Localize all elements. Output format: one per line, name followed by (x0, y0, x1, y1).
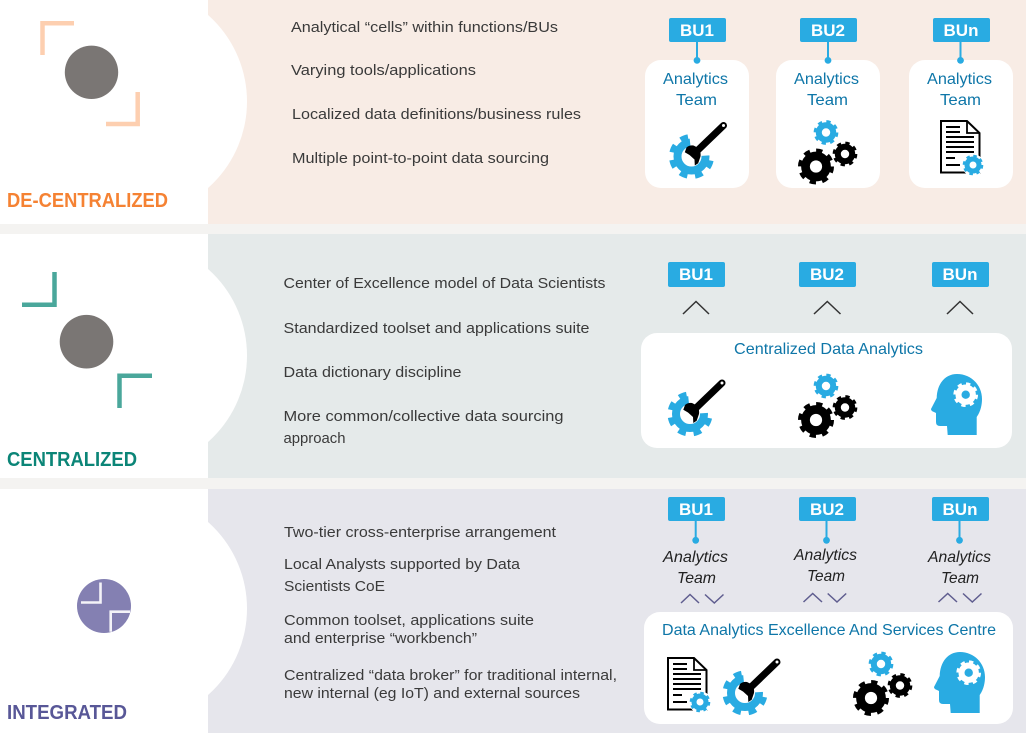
card: BUn analytics team: BUn (944, 21, 978, 40)
card: BU1 analytics team: Analytics (663, 71, 728, 88)
card: BUn analytics team: Team (940, 92, 981, 109)
card: data analytics excellence and services centre (644, 612, 1013, 724)
card: BUn analytics team (909, 18, 1013, 188)
card: BU2 analytics team: Team (807, 92, 848, 109)
column: BU2 analytics team: BU2 (810, 500, 844, 519)
text block: integrated traits: Scientists CoE (284, 578, 385, 595)
text block: integrated traits: Centralized “data broker” for traditional internal, (284, 667, 617, 684)
text block: de-centralized traits (291, 19, 581, 167)
column: BU1 analytics team: Team (677, 570, 716, 587)
card: BU2 analytics team (776, 18, 880, 188)
text block: de-centralized traits: Multiple point-to-point data sourcing (292, 150, 549, 167)
text block: centralized traits: Center of Excellence model of Data Scientists (284, 275, 606, 292)
card: BUn analytics team: Analytics (927, 71, 992, 88)
text block: integrated traits: Two-tier cross-enterprise arrangement (284, 524, 557, 541)
column: BUn analytics team: Analytics (927, 549, 991, 566)
column: BU1 analytics team: BU1 (679, 500, 713, 519)
icon: de-centralized logo (42, 23, 138, 124)
card: BU1 analytics team (645, 18, 749, 188)
column: BUn analytics team: BUn (943, 500, 977, 519)
heading: integrated: INTEGRATED (7, 702, 127, 724)
text block: integrated traits: and enterprise “workbench” (284, 630, 477, 647)
text block: integrated traits: Local Analysts supported by Data (284, 556, 521, 573)
card: centralized data analytics (641, 333, 1012, 448)
heading: centralized: CENTRALIZED (7, 449, 137, 471)
text block: centralized traits: approach (284, 430, 346, 447)
column: BUn analytics team (927, 497, 991, 602)
BU tabs with arrows: BU2 (810, 265, 844, 284)
column: BU2 analytics team (793, 497, 857, 602)
text block: de-centralized traits: Analytical “cells” within functions/BUs (291, 19, 558, 36)
card: BU1 analytics team: BU1 (680, 21, 714, 40)
card: BU2 analytics team: BU2 (811, 21, 845, 40)
column: BUn analytics team: Team (941, 570, 979, 587)
text block: integrated traits (284, 524, 617, 702)
BU tabs with arrows: BUn (943, 265, 977, 284)
column: BU1 analytics team: Analytics (662, 549, 728, 566)
icon: integrated logo (77, 579, 131, 633)
text block: de-centralized traits: Varying tools/applications (291, 62, 476, 79)
column: BU1 analytics team (662, 497, 728, 603)
column: BU2 analytics team: Analytics (793, 547, 857, 564)
text block: integrated traits: Common toolset, applications suite (284, 612, 534, 629)
text block: centralized traits: Data dictionary discipline (284, 364, 462, 381)
text block: centralized traits (284, 275, 606, 447)
panel: de-centralized (0, 0, 1026, 224)
text block: centralized traits: More common/collective data sourcing (284, 408, 564, 425)
BU tabs with arrows (668, 262, 989, 314)
heading: de-centralized: DE-CENTRALIZED (7, 190, 168, 212)
column: BU2 analytics team: Team (807, 568, 845, 585)
icon: centralized logo (22, 272, 152, 408)
card: BU2 analytics team: Analytics (794, 71, 859, 88)
card: centralized data analytics: Centralized Data Analytics (734, 341, 923, 358)
text block: centralized traits: Standardized toolset and applications suite (284, 320, 590, 337)
text block: integrated traits: new internal (eg IoT) and external sources (284, 685, 580, 702)
card: data analytics excellence and services centre: Data Analytics Excellence And Services Centre (662, 622, 996, 639)
card: BU1 analytics team: Team (676, 92, 717, 109)
panel: centralized (0, 234, 1026, 478)
panel: integrated (0, 489, 1026, 733)
BU tabs with arrows: BU1 (679, 265, 713, 284)
text block: de-centralized traits: Localized data definitions/business rules (292, 106, 581, 123)
